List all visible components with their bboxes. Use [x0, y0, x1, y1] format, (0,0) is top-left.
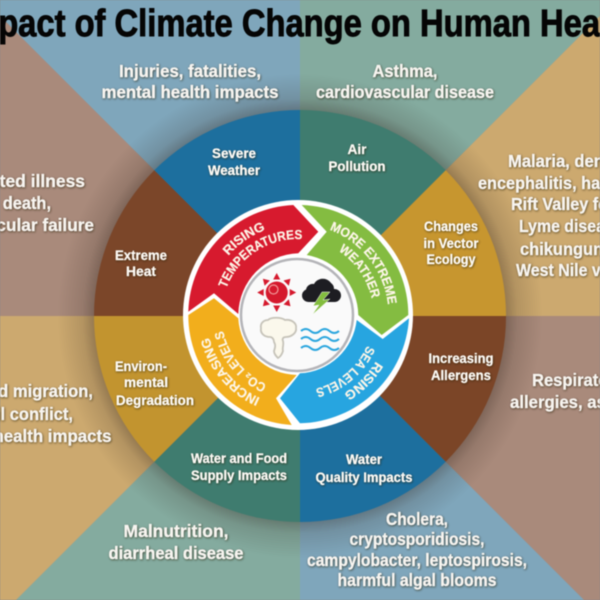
text: extreme heat impacts — [0, 171, 94, 235]
text: water quality impacts — [307, 509, 527, 590]
arrow: rising sea levels — [280, 318, 409, 423]
label: air pollution — [328, 142, 386, 174]
wheel of eight impact sectors — [94, 110, 506, 522]
text: severe weather impacts: mental health impacts — [102, 82, 279, 102]
sector: environmental degradation — [94, 316, 300, 462]
arrow: more extreme weather — [302, 205, 408, 335]
label: water and food supply — [191, 451, 287, 483]
icon: waves — [301, 329, 339, 350]
text: water quality impacts: Cholera, — [386, 509, 448, 529]
text: severe weather impacts — [102, 61, 279, 102]
label: environmental degradation: Degradation — [116, 393, 194, 408]
label: water quality — [316, 452, 412, 485]
arrow labels — [200, 221, 398, 406]
label: severe weather: Weather — [208, 163, 261, 178]
label: vector ecology: in Vector — [424, 236, 479, 251]
arrow: increasing CO2 levels — [188, 298, 297, 425]
text: food supply impacts — [108, 521, 244, 563]
text: water quality impacts: harmful algal blooms — [338, 570, 497, 590]
label: severe weather — [208, 146, 261, 178]
text: more extreme weather: WEATHER — [340, 242, 380, 299]
label: vector ecology: Changes — [424, 219, 478, 234]
text: food supply impacts: Malnutrition, — [124, 521, 228, 541]
label: air pollution: Pollution — [328, 159, 386, 174]
text: air pollution impacts: cardiovascular disease — [316, 82, 494, 102]
label: environmental degradation — [115, 359, 194, 408]
text: air pollution impacts — [316, 61, 494, 102]
label: water quality: Quality Impacts — [316, 470, 412, 485]
text: increasing CO2 levels: INCREASING — [200, 338, 260, 406]
sector: severe weather — [154, 110, 300, 316]
icon: storm cloud with lightning — [302, 279, 341, 315]
label: extreme heat — [115, 248, 167, 279]
label: environmental degradation: mental — [124, 375, 168, 390]
label: water quality: Water — [346, 452, 383, 467]
central ring — [182, 199, 414, 431]
text: allergen impacts — [510, 370, 600, 412]
icon: sun — [257, 273, 296, 312]
label: water and food supply: Water and Food — [191, 451, 287, 466]
text: air pollution impacts: Asthma, — [372, 61, 438, 81]
text: water quality impacts: campylobacter, leptospirosis, — [307, 550, 527, 570]
sector labels — [115, 142, 494, 485]
sector: extreme heat — [94, 170, 300, 316]
label: extreme heat: Extreme — [115, 248, 167, 263]
arrow: rising temperatures — [188, 205, 318, 314]
sector: vector ecology — [300, 170, 506, 316]
sector: water quality — [300, 316, 446, 522]
label: water and food supply: Supply Impacts — [191, 468, 287, 483]
label: allergens — [428, 351, 494, 383]
text: vector ecology impacts — [478, 151, 600, 280]
text: food supply impacts: diarrheal disease — [108, 543, 244, 563]
text: severe weather impacts: Injuries, fatalities, — [119, 61, 261, 81]
wheel shadow — [50, 66, 550, 566]
text: water quality impacts: cryptosporidiosis, — [350, 529, 484, 549]
sector: air pollution — [300, 110, 446, 316]
label: allergens: Increasing — [428, 351, 494, 366]
label: extreme heat: Heat — [126, 264, 157, 279]
sector: allergens — [300, 316, 506, 462]
label: vector ecology: Ecology — [426, 252, 476, 267]
center disc — [241, 259, 353, 371]
text: increasing CO2 levels: CO₂ LEVELS — [214, 330, 266, 392]
text: more extreme weather: MORE EXTREME — [330, 221, 398, 305]
icon: smoke cloud — [261, 318, 296, 358]
label: air pollution: Air — [348, 142, 367, 157]
text: rising temperatures: TEMPERATURES — [217, 229, 303, 287]
text: environmental degradation impacts — [0, 381, 112, 446]
text: rising sea levels: SEA LEVELS — [316, 346, 376, 398]
sector: water and food supply — [154, 316, 300, 522]
text: rising temperatures: RISING — [222, 222, 265, 256]
label: severe weather: Severe — [212, 146, 256, 161]
label: vector ecology — [424, 219, 479, 267]
label: allergens: Allergens — [431, 368, 491, 383]
label: environmental degradation: Environ- — [115, 359, 167, 374]
text: rising sea levels: RISING — [344, 361, 384, 400]
